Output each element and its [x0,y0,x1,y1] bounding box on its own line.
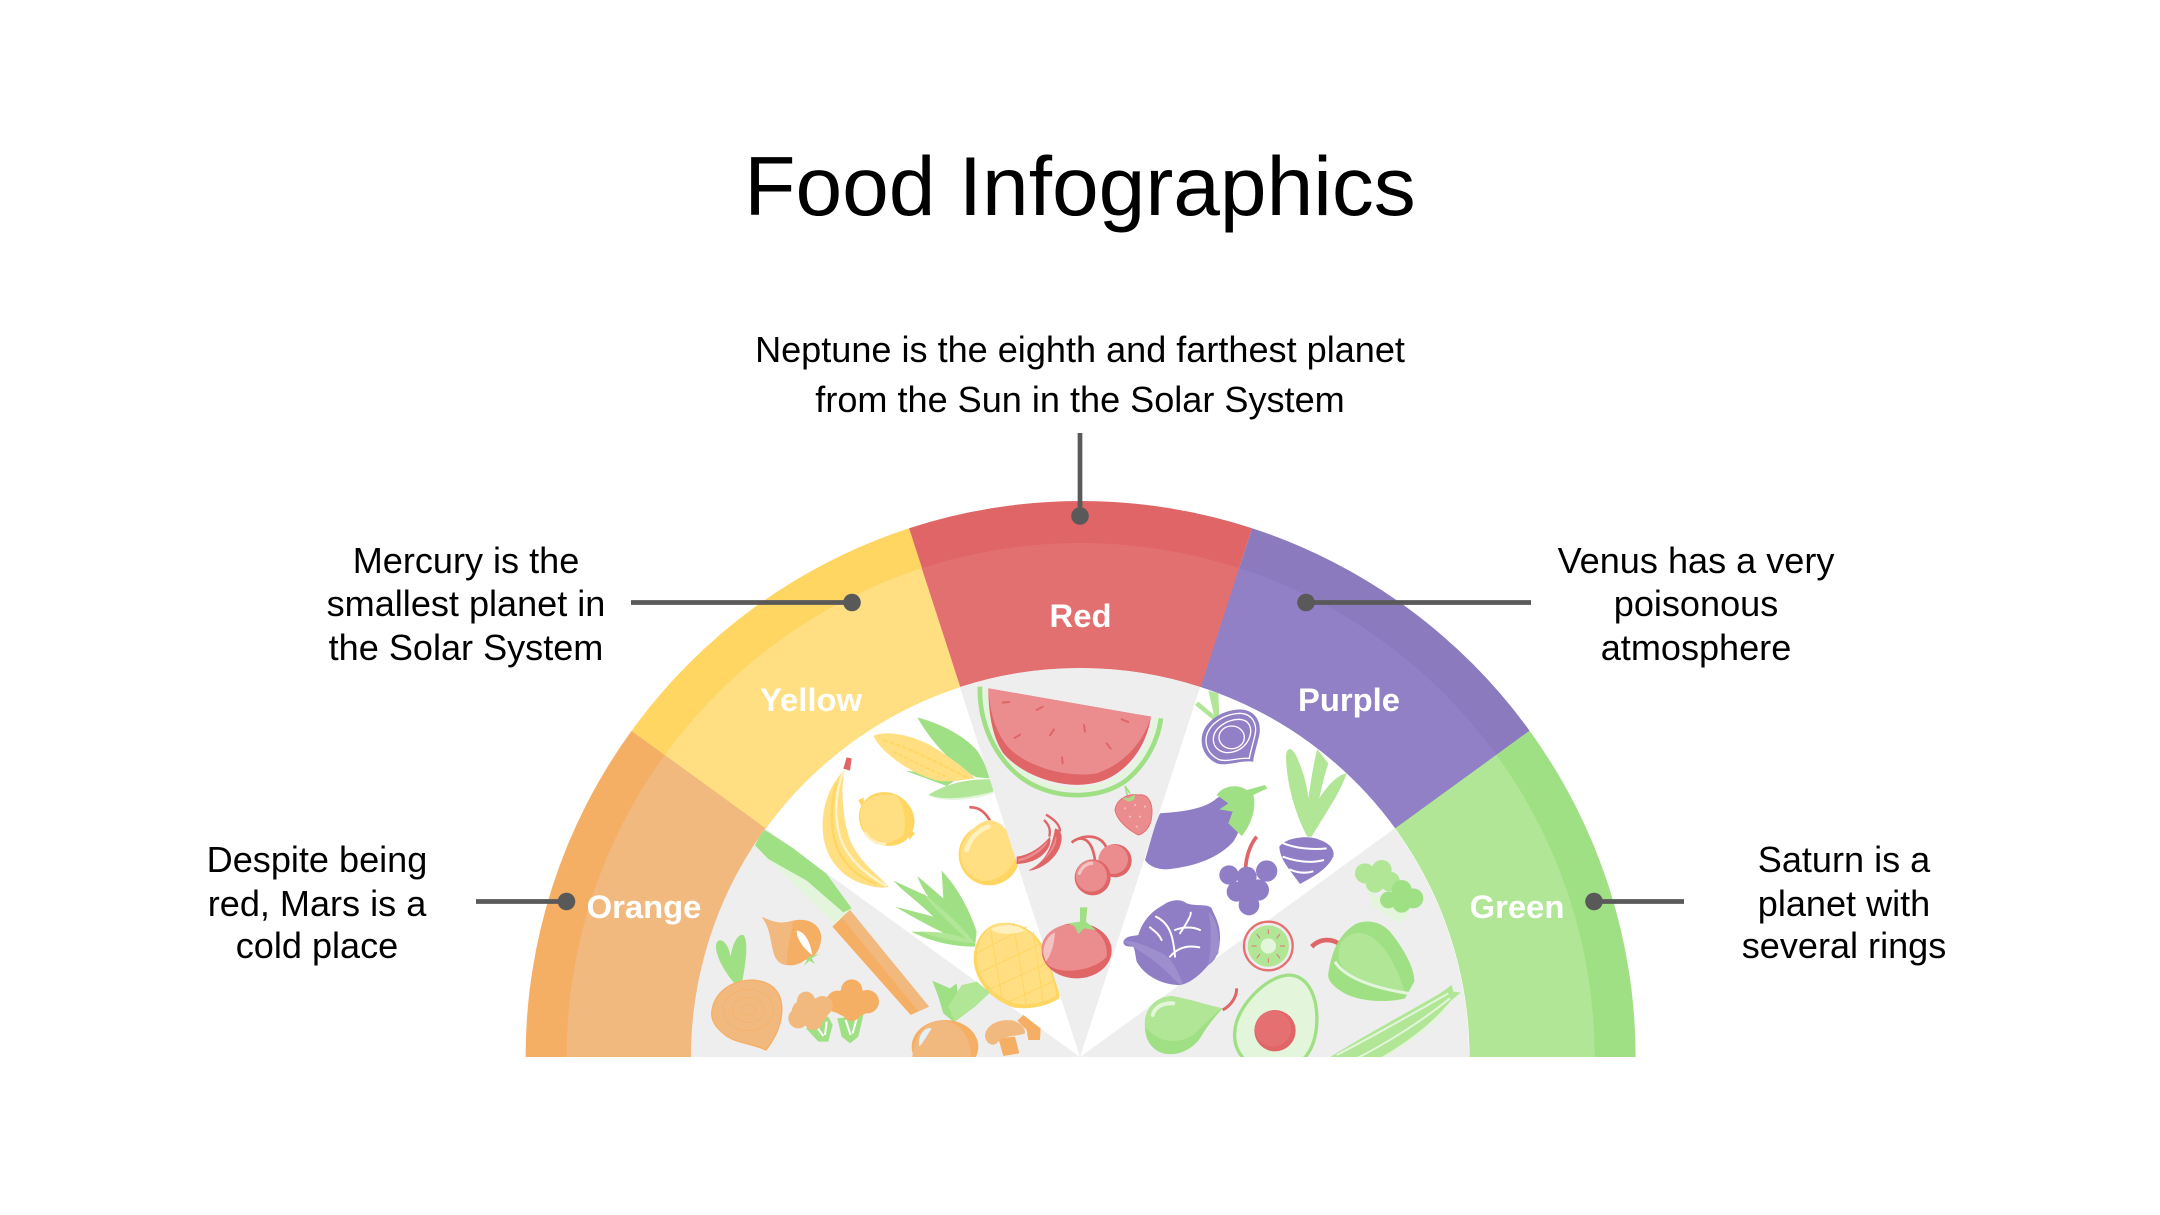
icon: grapes [1219,837,1277,915]
text block: Mars: cold place [236,925,398,966]
icon: shallot [762,917,821,966]
icon: bell pepper [1312,921,1414,1001]
icons: orange foods [712,829,1041,1073]
text block: Mars: Despite being [207,839,427,880]
callout connector: Saturn [1585,893,1684,910]
segment label: Purple: Purple [1298,681,1400,718]
icon: kiwi [1244,922,1293,970]
icon: red onion [1195,691,1260,764]
icon: zucchini [1328,985,1461,1062]
icon: tomato [1042,907,1112,978]
text block: Venus: atmosphere [1601,627,1791,668]
icon: lemon [848,781,925,857]
text block: Mercury: smallest planet in [327,583,605,624]
icons: red foods [980,687,1161,978]
icon: beet [1279,749,1347,884]
icons: purple foods [1123,691,1347,985]
title: Food Infographics [744,139,1416,233]
icon: carrot [832,910,929,1015]
icon: onion with leaves [712,935,782,1050]
icon: broccoli [788,979,879,1043]
text block: Neptune: Neptune is the eighth and farthest planet [755,329,1405,370]
segment: purple [1201,528,1530,828]
icon: pineapple leaves [893,871,977,947]
callout connector: Mars [476,893,575,910]
callout connector: Neptune [1071,433,1089,525]
icon: broccoli [1355,860,1423,923]
icon: watermelon [980,687,1161,795]
icon: strawberry [1115,786,1152,835]
text block: Saturn: planet with [1758,883,1930,924]
text block: Saturn: several rings [1742,925,1946,966]
icon: mango [959,807,1020,885]
text block: Venus: Venus has a very [1558,540,1834,581]
icon: leafy root vegetable [912,980,990,1057]
segment label: Yellow: Yellow [760,681,863,718]
segment: green [1395,731,1636,1057]
icon: chili peppers [1017,815,1062,871]
text block: Neptune: from the Sun in the Solar System [815,379,1345,420]
text block: Mercury: Mercury is the [353,540,579,581]
icon: eggplant [1145,785,1267,869]
icon: avocado [1235,975,1317,1071]
semicircle chart [526,501,1636,1057]
segment: red [909,501,1252,687]
text block: Mars: red, Mars is a [208,883,427,924]
callout connector: Mercury [631,594,861,611]
segment label: Red: Red [1050,597,1111,634]
callout connector: Venus [1297,594,1531,611]
segment label: Green: Green [1470,888,1564,925]
food wedge: green background [1080,828,1469,1057]
food wedge: red background [960,668,1200,1057]
icon: mushroom [985,1015,1041,1056]
text block: Saturn: Saturn is a [1758,839,1931,880]
food wedge: orange background [691,828,1080,1057]
icon: cabbage [1123,900,1220,985]
text block: Mercury: the Solar System [329,627,603,668]
icon: cherries [1072,837,1132,895]
icon: pineapple [974,923,1059,1008]
icon: corn [873,717,993,800]
icon: carrot top [755,829,852,923]
icon: banana [823,757,889,888]
segment: orange [526,731,766,1057]
segment label: Orange: Orange [587,888,701,925]
icons: yellow foods [823,717,1059,1008]
segment: yellow [632,528,960,828]
icons: green foods [1145,860,1461,1071]
text block: Venus: poisonous [1614,583,1778,624]
icon: pear [1145,988,1237,1054]
